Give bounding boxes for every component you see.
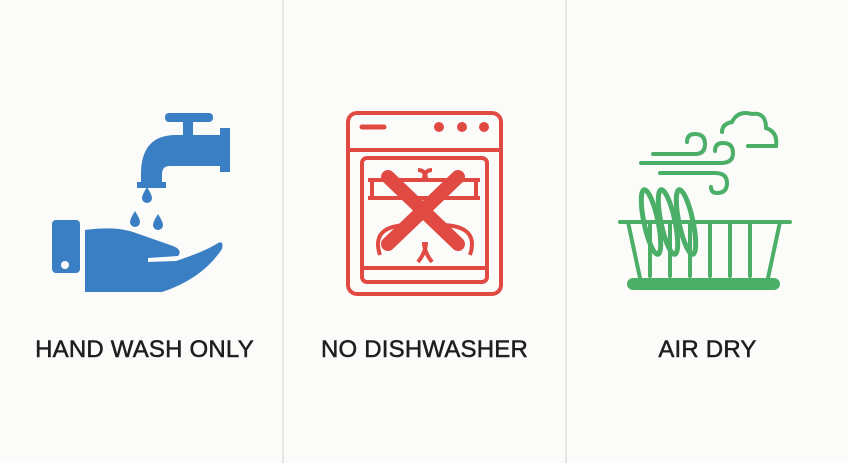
label: hand wash only: HAND WASH ONLY <box>35 336 254 363</box>
label: no dishwasher: NO DISHWASHER <box>321 336 528 363</box>
icon: air dry <box>620 113 790 278</box>
icon: no dishwasher <box>348 113 501 294</box>
label: air dry: AIR DRY <box>658 336 757 363</box>
icon: hand wash <box>52 113 230 292</box>
